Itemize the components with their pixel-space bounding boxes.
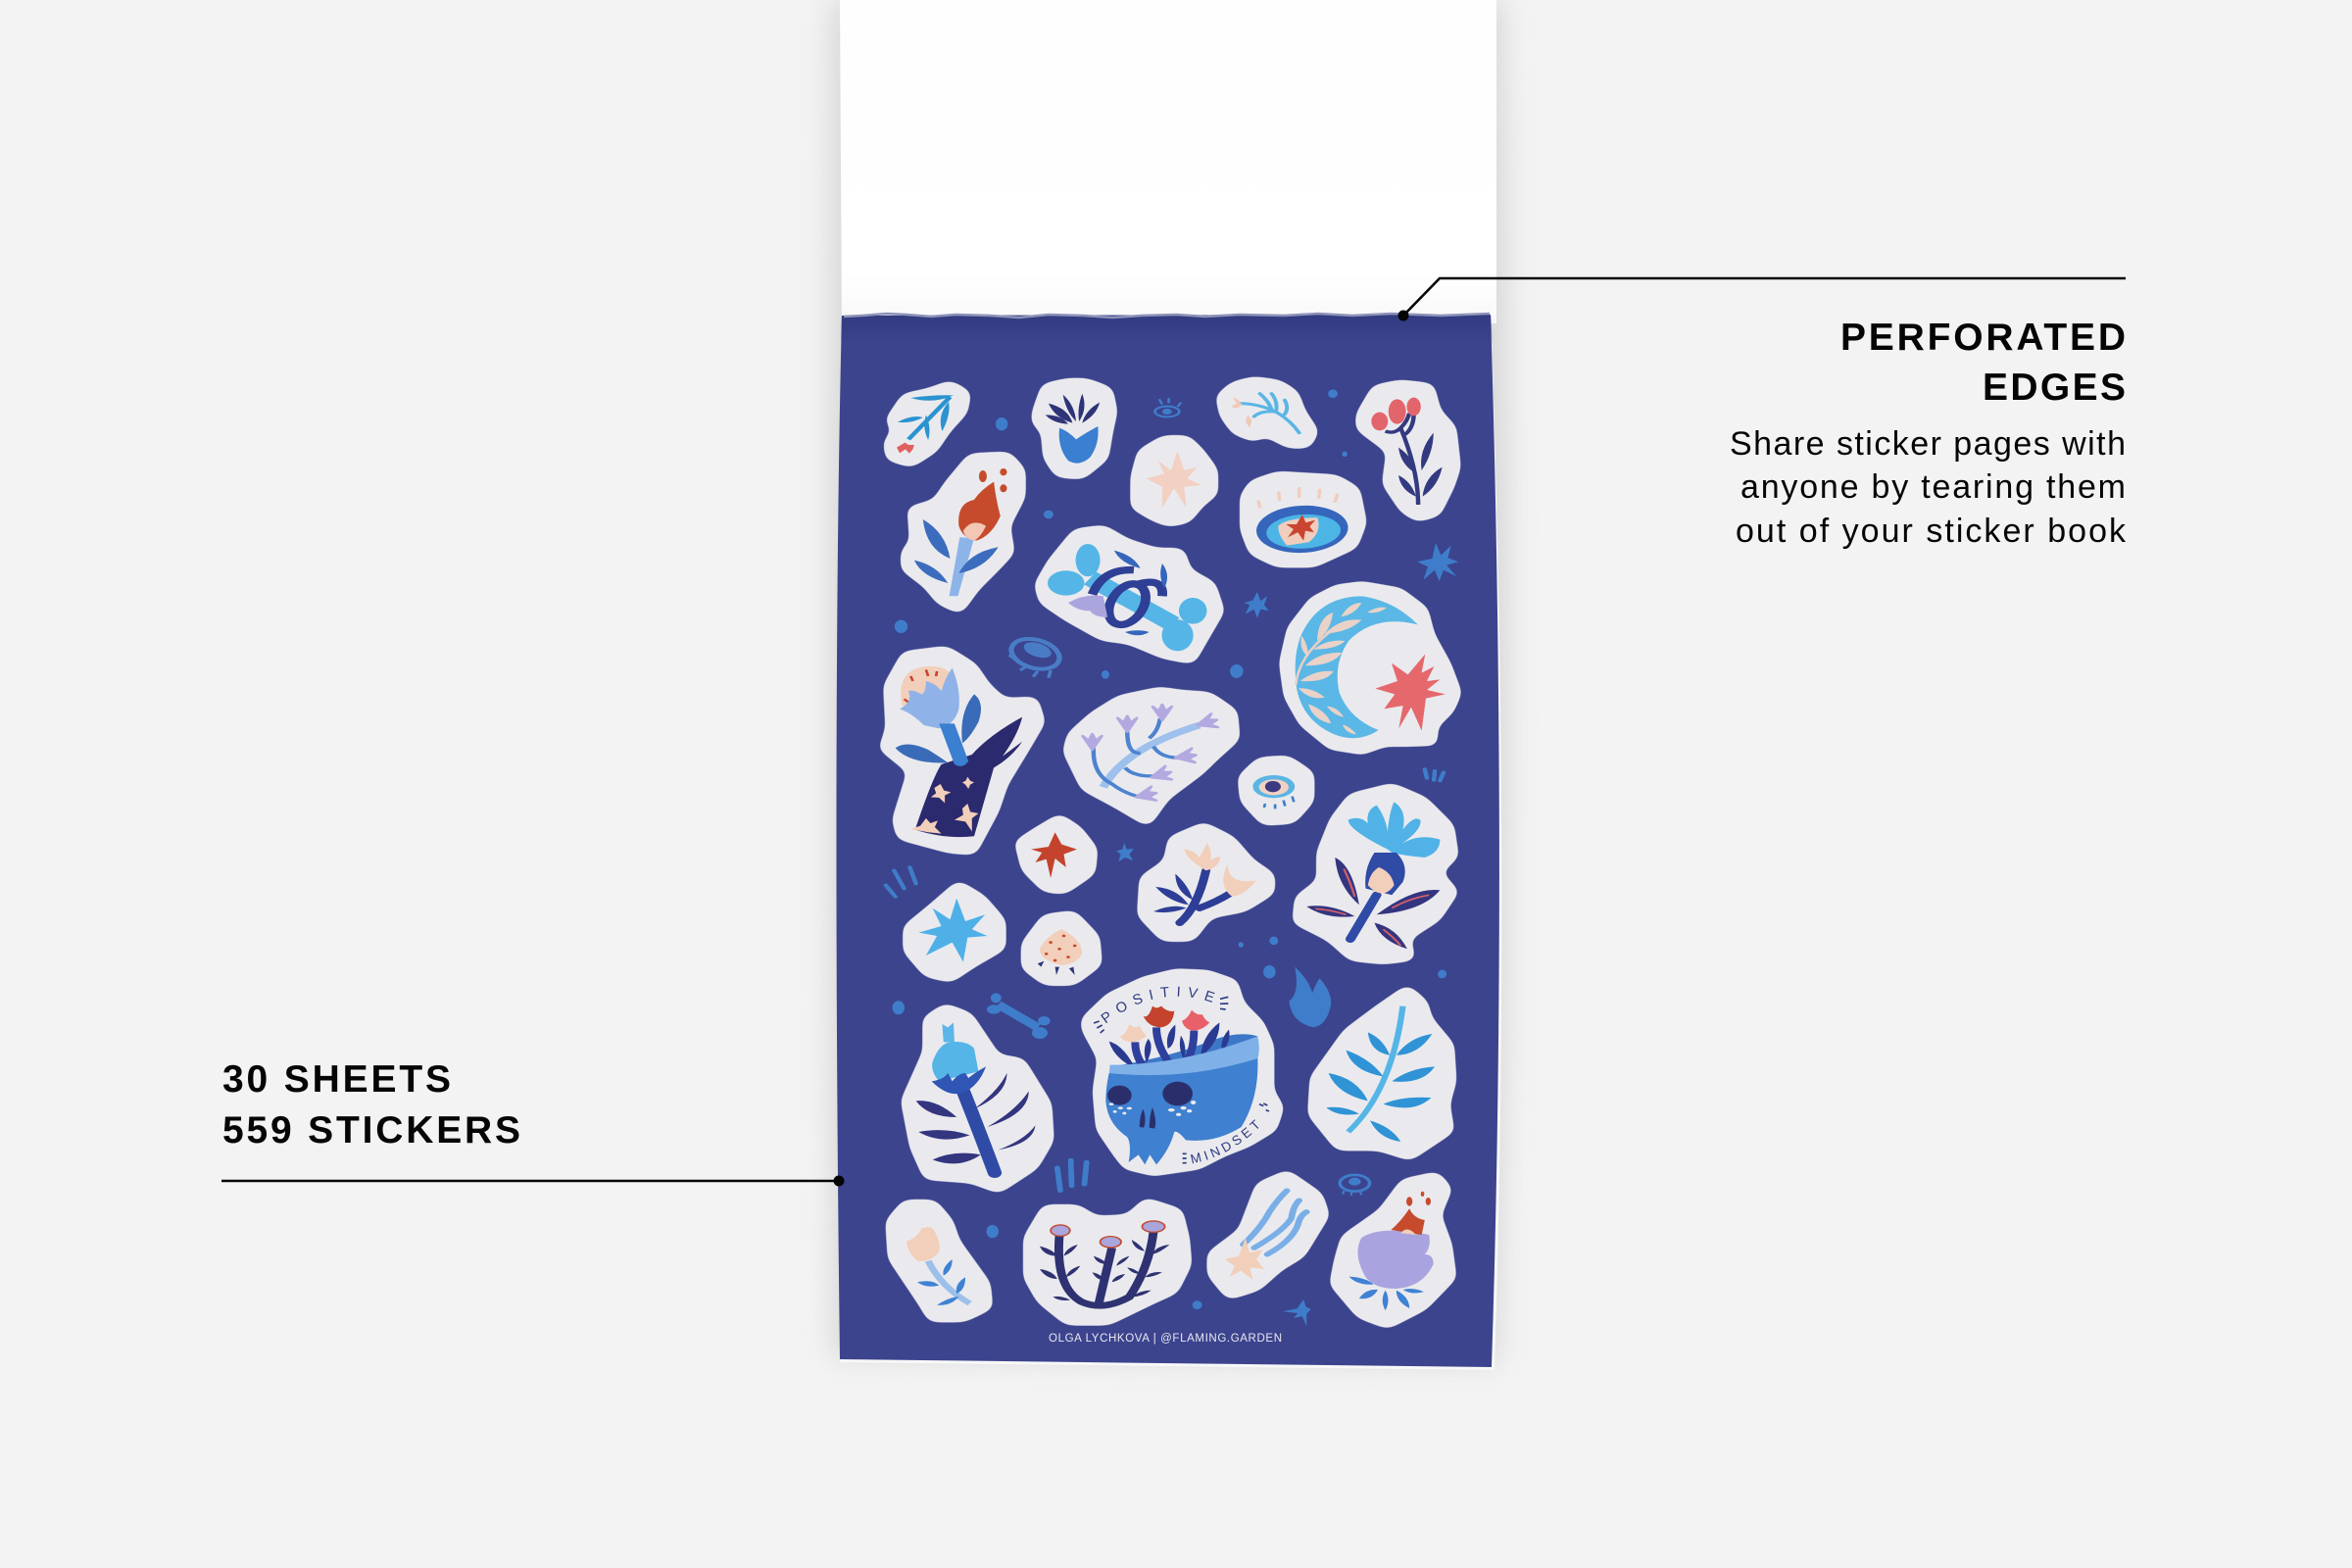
sticker: lilac branch [1068, 691, 1235, 821]
callout: sheets leader line [221, 1176, 845, 1186]
text: perforated edges description [1730, 425, 2127, 550]
sticker: pot with dark leaves [1037, 382, 1112, 475]
stickers: upper sheet [889, 380, 1458, 679]
sticker: blue eye [1246, 475, 1361, 564]
background doodles: upper [895, 389, 1458, 679]
heading: perforated edges: EDGES [1983, 367, 2126, 409]
sticker lettering: mindset: MINDSET [1191, 1119, 1258, 1164]
text: perforated edges description: anyone by tearing them [1740, 468, 2126, 506]
sticker: peach tulip [891, 1203, 987, 1318]
sticker: blue cornflower [1298, 787, 1453, 960]
sticker: blue leaf branch [1313, 990, 1451, 1156]
sticker: bone with rings [1040, 529, 1219, 660]
sticker: peach star [1136, 439, 1212, 522]
heading: sheets and stickers count [222, 1058, 520, 1152]
sticker: flame flower [906, 456, 1020, 610]
sticker: crescent moon with star [1283, 585, 1457, 751]
sticker sheet [836, 315, 1499, 1367]
sticker: red star [1020, 818, 1093, 890]
background doodles: middle [886, 769, 1446, 1014]
stickers: lower sheet [891, 967, 1451, 1326]
sticker: peach berry [1027, 914, 1097, 982]
stickers: middle sheet [884, 650, 1453, 1014]
credit line on sheet: OLGA LYCHKOVA | @FLAMING.GARDEN [1049, 1333, 1282, 1345]
sticker book shadow [830, 0, 1508, 1364]
text: perforated edges description: Share sticker pages with [1730, 425, 2126, 463]
heading: sheets and stickers count: 559 STICKERS [222, 1109, 520, 1152]
text: perforated edges description: out of your sticker book [1736, 513, 2127, 550]
sticker: red buds [1361, 384, 1455, 517]
sticker: blue star [908, 885, 1001, 978]
sticker: blue branch [889, 385, 965, 464]
sticker: peach flower with moon [1143, 826, 1269, 938]
callout: perforated edges leader line [1397, 278, 2126, 321]
sticker: small eye [1244, 760, 1309, 821]
sticker: three eye plant [1029, 1202, 1187, 1321]
sticker: blue bud on leafy stem [906, 1007, 1049, 1189]
fold band [841, 315, 1493, 345]
sheet underlayer [840, 315, 1501, 1370]
sticker: hand holding flower [884, 650, 1040, 851]
heading: sheets and stickers count: 30 SHEETS [222, 1058, 451, 1101]
sticker: purple flower with flame [1335, 1176, 1451, 1325]
perforated torn edge [844, 314, 1490, 318]
sticker: waves with star [1212, 1174, 1324, 1296]
heading: perforated edges [1840, 317, 2126, 409]
torn white back page [840, 0, 1496, 323]
sticker: light branch [1221, 380, 1313, 444]
sticker lettering: positive: POSITIVE [1101, 986, 1215, 1023]
background doodles: lower [987, 967, 1370, 1326]
heading: perforated edges: PERFORATED [1840, 317, 2126, 359]
sticker: positive mindset skull [1081, 968, 1284, 1176]
